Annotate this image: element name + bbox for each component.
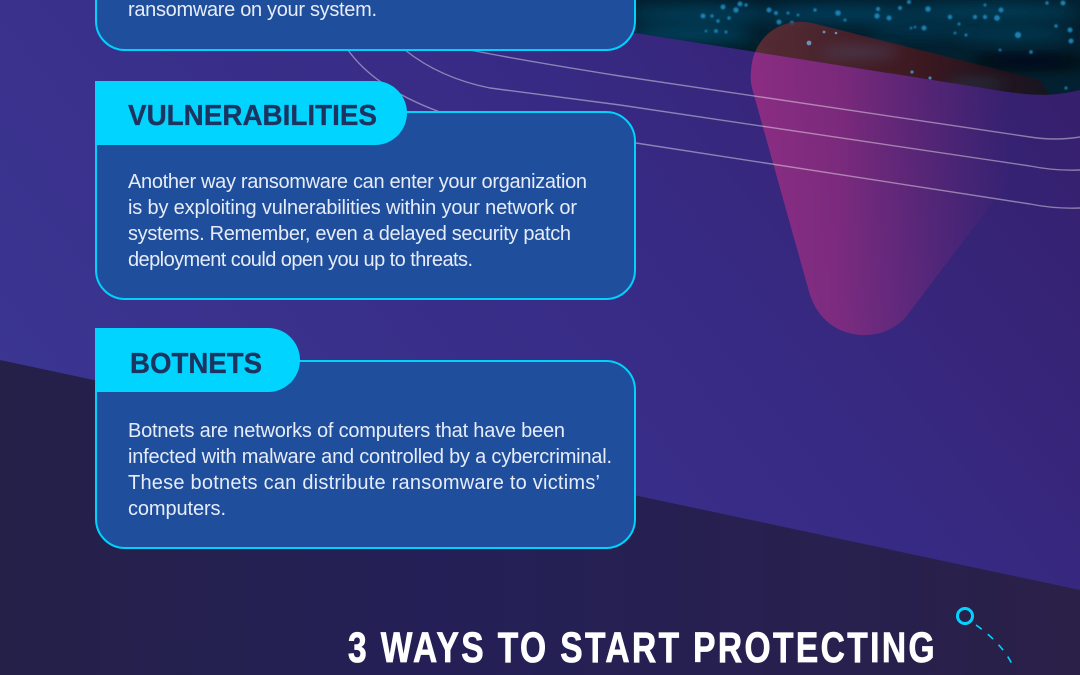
stars <box>701 0 1073 89</box>
body text <box>128 171 587 271</box>
body text <box>128 420 612 520</box>
body text: is by exploiting vulnerabilities within your network or <box>128 197 577 219</box>
heading tab <box>95 328 300 392</box>
dark lower band <box>0 360 1080 675</box>
card: first (cut off at top) <box>96 0 635 50</box>
heading tab: VULNERABILITIES <box>128 100 377 132</box>
card body <box>96 112 635 299</box>
title: 3 WAYS TO START PROTECTING <box>348 624 935 672</box>
starfield photo band <box>620 0 1080 100</box>
body text: Another way ransomware can enter your organization <box>128 171 587 193</box>
pink rounded triangle shape <box>751 22 1060 335</box>
body text: Botnets are networks of computers that have been <box>128 420 565 442</box>
body text: infected with malware and controlled by a cybercriminal. <box>128 446 612 468</box>
heading tab: BOTNETS <box>130 348 262 380</box>
card: botnets <box>95 328 635 548</box>
network lines <box>348 50 1080 208</box>
body text: computers. <box>128 498 226 520</box>
icon: dashed connector with ring <box>958 608 1014 668</box>
card body <box>96 361 635 548</box>
body text: deployment could open you up to threats. <box>128 249 473 271</box>
heading tab <box>95 81 407 145</box>
body text: These botnets can distribute ransomware to victims’ <box>128 472 600 494</box>
body text: systems. Remember, even a delayed security patch <box>128 223 571 245</box>
card: vulnerabilities <box>95 81 635 299</box>
